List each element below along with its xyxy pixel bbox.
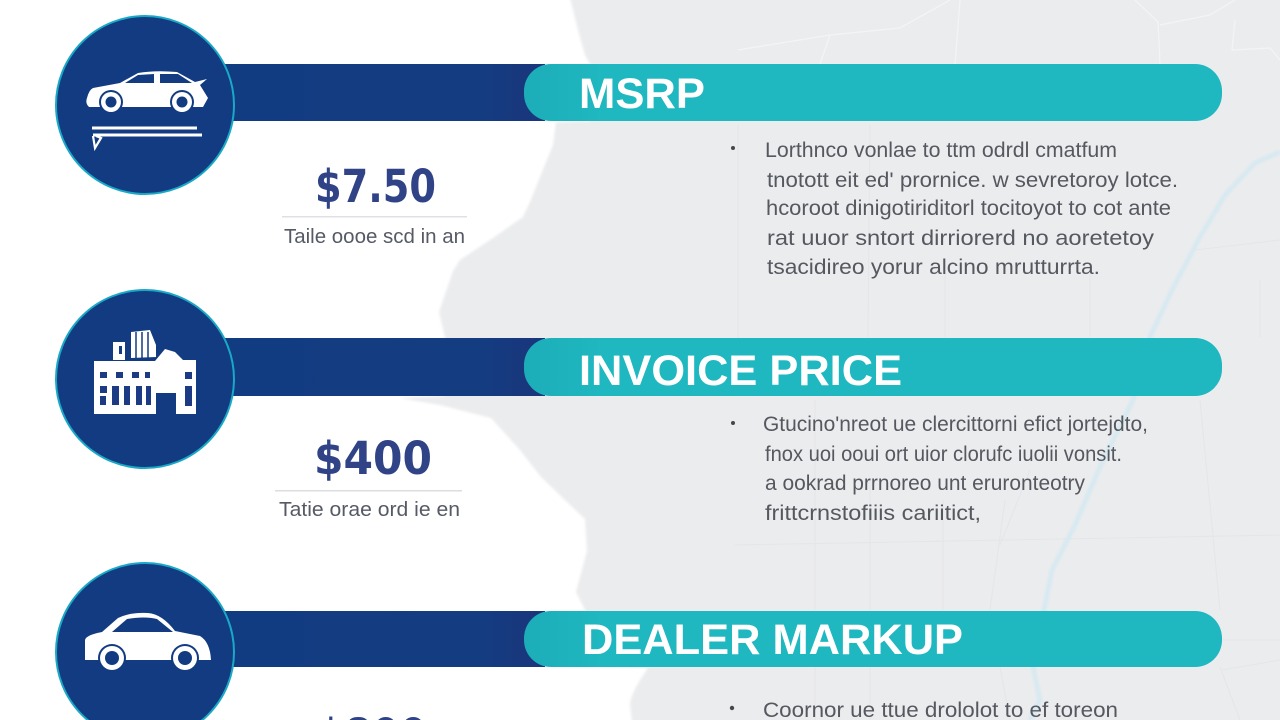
price: invoice price: $400: [314, 432, 432, 485]
text block: invoice price: a ookrad prrnoreo unt eruronteotry: [765, 472, 1085, 495]
icon: sedan car: [56, 563, 234, 720]
section: MSRP: [56, 16, 1222, 279]
text block: MSRP: tsacidireo yorur alcino mrutturrta.: [767, 256, 1100, 279]
icon: dealership building: [56, 290, 234, 468]
section: dealer markup: [56, 563, 1222, 720]
background map: [400, 0, 1280, 720]
text block: invoice price: frittcrnstofiiis cariitict,: [765, 502, 981, 525]
icon: car on lift: [56, 16, 234, 194]
header band: invoice price: INVOICE PRICE: [579, 347, 902, 395]
section: invoice price: [56, 290, 1222, 525]
text block: MSRP: [731, 139, 1178, 279]
text block: MSRP: tnotott eit ed' prornice. w sevretoroy lotce.: [767, 169, 1178, 192]
price: MSRP: $7.50: [315, 160, 436, 213]
text block: MSRP: Lorthnco vonlae to ttm odrdl cmatfum: [765, 139, 1117, 162]
caption: MSRP: Taile oooe scd in an: [284, 226, 465, 248]
header band: invoice price: [225, 338, 1222, 396]
text block: invoice price: [731, 413, 1148, 525]
text block: invoice price: fnox uoi ooui ort uior clorufc iuolii vonsit.: [765, 443, 1122, 466]
caption: invoice price: Tatie orae ord ie en: [279, 499, 460, 521]
header band: MSRP: [225, 64, 1222, 121]
header band: dealer markup: [225, 611, 1222, 667]
header band: MSRP: MSRP: [579, 70, 705, 118]
header band: dealer markup: DEALER MARKUP: [582, 616, 963, 664]
text block: MSRP: hcoroot dinigotiriditorl tocitoyot to cot ante: [766, 197, 1171, 220]
text block: invoice price: Gtucino'nreot ue clercittorni efict jortejdto,: [763, 413, 1148, 436]
text block: MSRP: rat uuor sntort dirriorerd no aoretetoy: [767, 227, 1155, 250]
